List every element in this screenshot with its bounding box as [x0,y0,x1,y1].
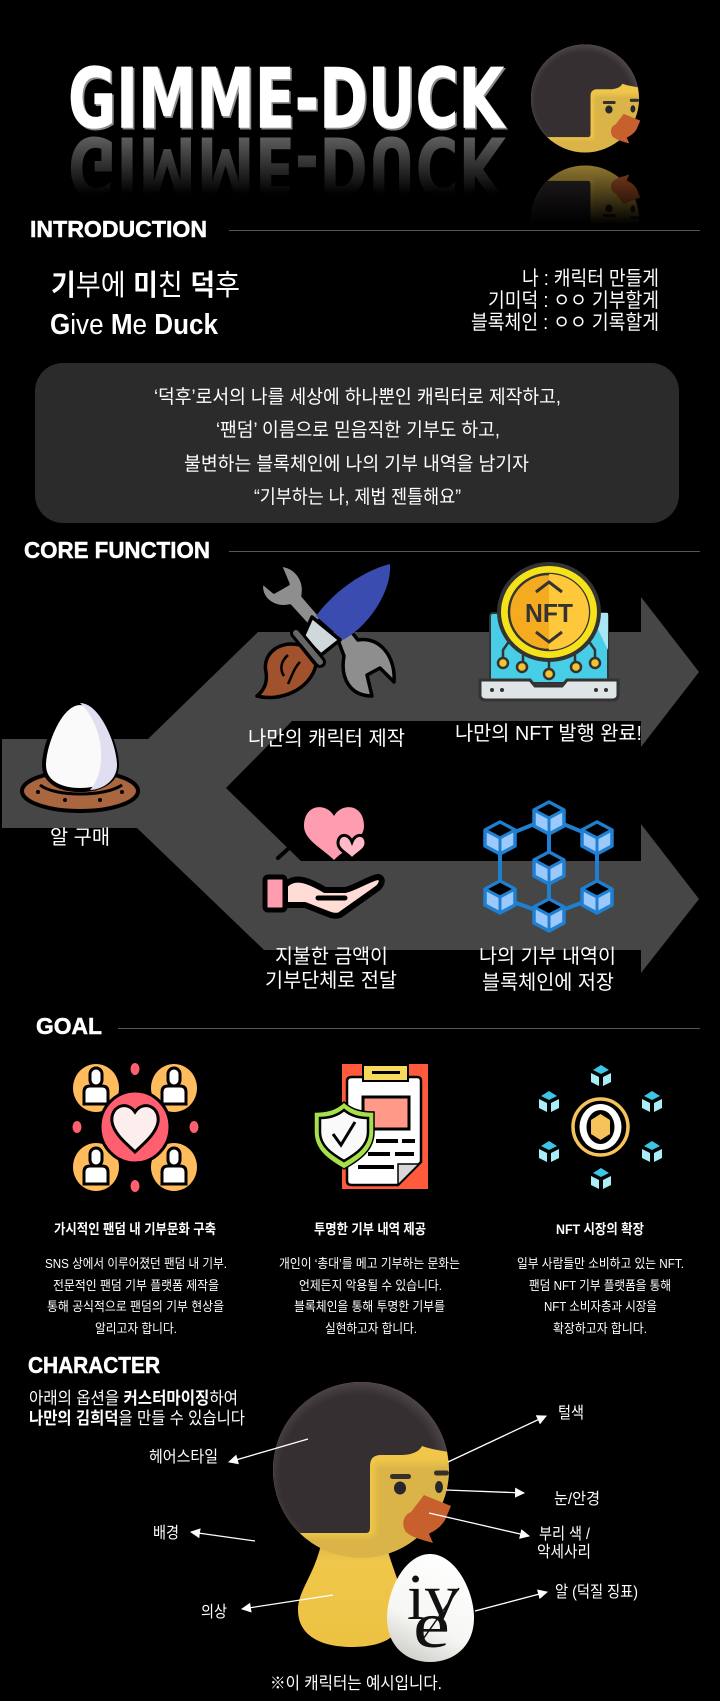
label: beak color and accessory: 부리 색 / [539,1525,590,1543]
arrow: beak [429,1513,529,1536]
heading: goal: GOAL [36,1013,102,1039]
label: outfit: 의상 [201,1603,227,1621]
goal text: fandom donation culture: 가시적인 팬덤 내 기부문화 구축 [54,1221,216,1237]
icon: NFT laptop [480,564,618,700]
goal text: fandom donation culture: 전문적인 팬덤 기부 플랫폼 제작을 [53,1278,219,1293]
character: egg with logo: e [413,1589,450,1662]
label: hairstyle: 헤어스타일 [149,1448,218,1466]
goal text: transparent donation history: 투명한 기부 내역 제공 [314,1221,426,1237]
text block: name meaning: 나 : 캐릭터 만들게 [522,267,659,290]
text block: customization note: 아래의 옵션을 커스터마이징하여 [29,1389,238,1408]
flow arrow background [2,597,699,973]
title: GIMME-DUCK: GIMME-DUCK [70,52,507,149]
goal text: fandom donation culture: 알리고자 합니다. [95,1321,177,1336]
goal text: NFT market growth: NFT 시장의 확장 [556,1221,644,1237]
label: fur color: 털색 [558,1404,584,1422]
step label: character creation: 나만의 캐릭터 제작 [248,727,405,750]
icon: NFT laptop: NFT [525,598,573,628]
icon: fandom heart [72,1063,198,1192]
tagline: Korean: 기부에 미친 덕후 [51,269,240,302]
goal text: NFT market growth: NFT 소비자층과 시장을 [544,1299,657,1314]
step label: buy egg: 알 구매 [50,826,110,849]
icon: NFT market expansion [539,1065,662,1189]
step label: saved on blockchain [479,945,616,994]
step label: saved on blockchain: 블록체인에 저장 [482,971,614,994]
goal text: transparent donation history: 실현하고자 합니다. [325,1321,417,1336]
text block: customization note [29,1389,245,1428]
goal text: fandom donation culture [45,1221,227,1336]
goal text: transparent donation history: 언제든지 악용될 수 있습니다. [299,1278,442,1293]
icon: hand with hearts [265,807,382,916]
duck head reflection [531,166,640,221]
goal text: transparent donation history: 블록체인을 통해 투명한 기부를 [294,1299,445,1314]
goal text: fandom donation culture: SNS 상에서 이루어졌던 팬덤 내 기부. [45,1256,227,1271]
text block: name meaning: 기미덕 : ㅇㅇ 기부할게 [488,289,659,312]
heading: introduction: INTRODUCTION [30,216,207,242]
arrow: background [191,1532,255,1541]
icon: blockchain network [485,802,612,931]
arrow: egg [475,1592,547,1611]
step label: NFT issued: 나만의 NFT 발행 완료! [455,722,642,745]
step label: payment delivered: 기부단체로 전달 [265,969,397,992]
heading: character: CHARACTER [28,1352,160,1378]
step label: payment delivered [265,945,397,992]
panel: concept statement: “기부하는 나, 제법 젠틀해요” [254,486,461,508]
label: beak color and accessory: 악세사리 [537,1543,591,1561]
character: egg with logo: v [425,1561,459,1634]
goal text: NFT market growth: 확장하고자 합니다. [553,1321,647,1336]
label: eyes and glasses: 눈/안경 [554,1490,600,1508]
panel: concept statement: ‘덕후’로서의 나를 세상에 하나뿐인 캐릭터로 제작하고, [154,386,561,408]
title: GIMME-DUCK: GIMME-DUCK [68,50,506,148]
text block: customization note: 나만의 김희덕을 만들 수 있습니다 [29,1409,245,1428]
icon: egg in nest [22,703,138,811]
icon: wrench and brush [257,564,394,698]
icon: clipboard and shield [314,1064,428,1189]
panel: concept statement: 불변하는 블록체인에 나의 기부 내역을 남기자 [184,453,529,475]
label: beak color and accessory [537,1525,591,1561]
panel: concept statement: ‘팬덤’ 이름으로 믿음직한 기부도 하고, [216,419,500,441]
text block: name meaning [471,267,659,334]
character: egg with logo [387,1554,474,1662]
goal text: NFT market growth: 일부 사람들만 소비하고 있는 NFT. [517,1256,684,1271]
tagline: English: Give Me Duck [50,309,219,341]
goal text: NFT market growth: 팬덤 NFT 기부 플랫폼을 통해 [529,1278,671,1293]
step label: saved on blockchain: 나의 기부 내역이 [479,945,616,968]
arrow: outfit [242,1595,333,1609]
arrow: eyes [446,1490,524,1493]
goal text: fandom donation culture: 통해 공식적으로 팬덤의 기부 현상을 [47,1299,224,1314]
arrow: hairstyle [229,1439,308,1462]
step label: payment delivered: 지불한 금액이 [275,945,388,968]
goal text: transparent donation history [279,1221,460,1336]
footnote: ※이 캐릭터는 예시입니다. [270,1674,442,1693]
title reflection: GIMME-DUCK [68,118,506,214]
icon: duck head logo [524,37,646,160]
arrow: fur color [448,1416,546,1462]
character: duck head [261,1370,461,1570]
character: duck body [298,1540,404,1647]
label: background: 배경 [153,1524,179,1542]
label: egg fandom mark: 알 (덕질 징표) [555,1583,638,1601]
character: egg with logo: i [407,1561,425,1634]
heading: core function: CORE FUNCTION [24,537,210,563]
text block: name meaning: 블록체인 : ㅇㅇ 기록할게 [471,311,659,334]
goal text: transparent donation history: 개인이 ‘총대’를 메고 기부하는 문화는 [279,1256,460,1271]
goal text: NFT market growth [517,1221,684,1336]
panel: concept statement [35,363,679,523]
